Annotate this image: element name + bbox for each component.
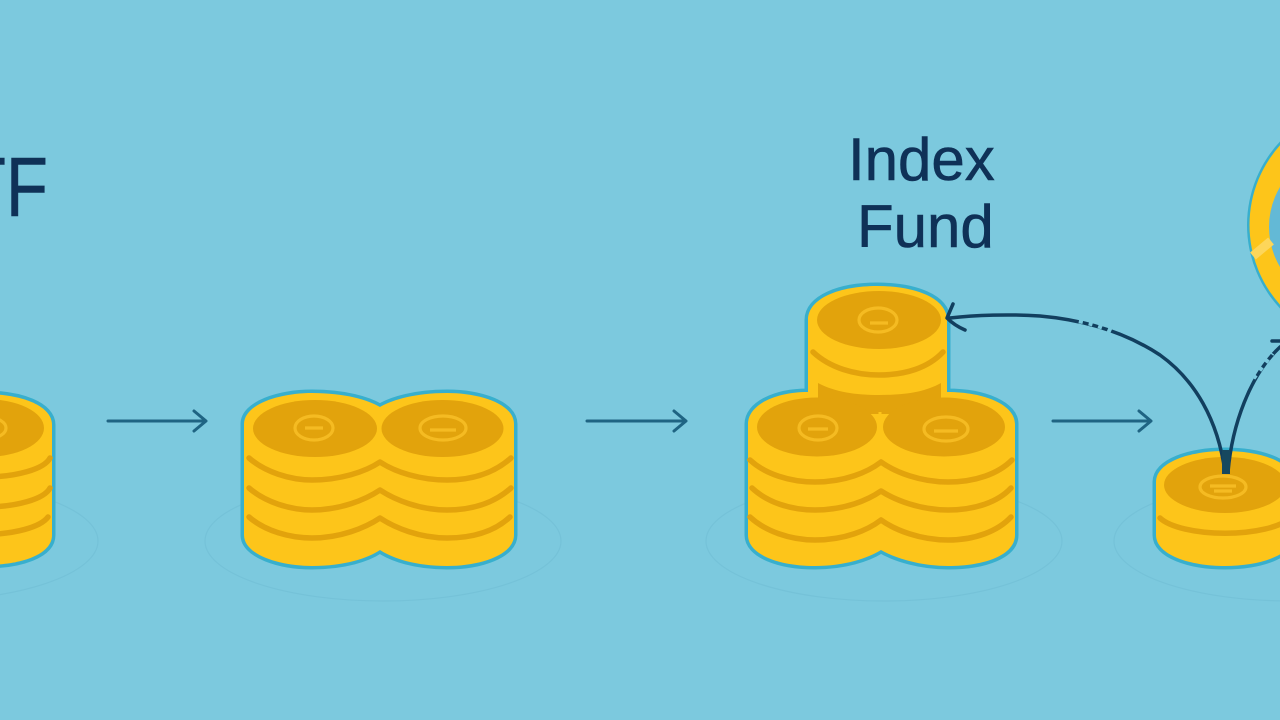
curved arrow: to the ring coin bbox=[1222, 341, 1280, 474]
coin stack: single column at right edge bbox=[1114, 451, 1280, 601]
coin stack: single column at left edge bbox=[0, 394, 98, 601]
arrow: second to third stack bbox=[587, 411, 686, 431]
coin stack: two columns bbox=[205, 393, 561, 601]
arrow: third to fourth stack bbox=[1053, 411, 1151, 431]
ring coin cropped at right edge bbox=[1247, 103, 1280, 347]
arrow: first to second stack bbox=[108, 411, 206, 431]
curved arrow: to the Index Fund stack bbox=[947, 304, 1225, 472]
heading: Index Fund: Index bbox=[848, 126, 995, 193]
heading: Index Fund bbox=[848, 126, 995, 260]
heading: Index Fund: Fund bbox=[857, 193, 994, 260]
coin stack: three-column pyramid bbox=[706, 286, 1062, 601]
